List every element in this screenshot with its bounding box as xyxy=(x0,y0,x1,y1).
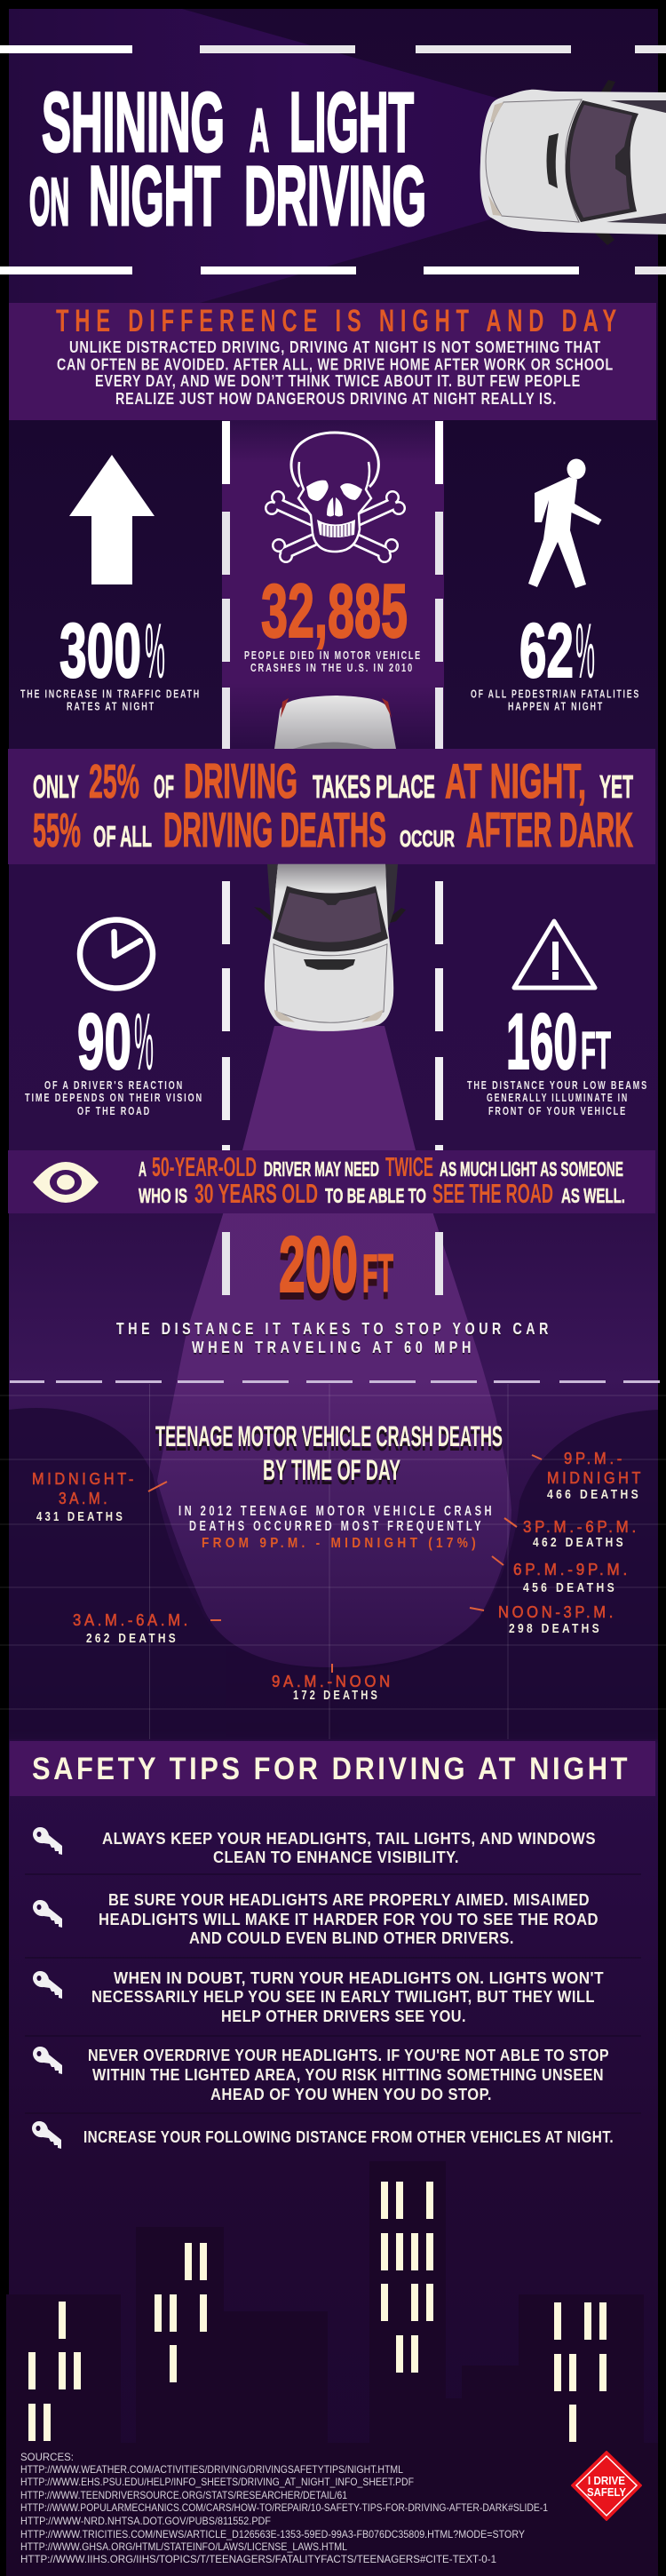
tip text: BE SURE YOUR HEADLIGHTS ARE PROPERLY AIMED. MISAIMED xyxy=(108,1891,590,1909)
building silhouettes xyxy=(6,2161,658,2576)
logo: I Drive Safely: I DRIVE xyxy=(588,2474,625,2487)
logo: I Drive Safely: SAFELY xyxy=(587,2485,626,2499)
label: midnight to 3am: MIDNIGHT- xyxy=(32,1470,137,1488)
line two: AS WELL. xyxy=(561,1184,625,1207)
label: 3pm to 6pm: 3P.M.-6P.M. xyxy=(523,1518,639,1536)
label: 9pm to midnight: MIDNIGHT xyxy=(547,1469,644,1487)
line one: YET xyxy=(599,768,633,805)
tip text: NECESSARILY HELP YOU SEE IN EARLY TWILIGHT, BUT THEY WILL xyxy=(91,1988,595,2006)
logo: I Drive Safely xyxy=(572,2452,641,2520)
tip text: WITHIN THE LIGHTED AREA, YOU RISK HITTING SOMETHING UNSEEN xyxy=(92,2066,604,2084)
line two: WHO IS xyxy=(139,1184,187,1207)
number 62%: 62 xyxy=(519,608,574,694)
icon: key xyxy=(33,1900,62,1928)
line one: 50-YEAR-OLD xyxy=(152,1151,257,1182)
chart description: DEATHS OCCURRED MOST FREQUENTLY xyxy=(189,1519,484,1534)
tip text: AND COULD EVEN BLIND OTHER DRIVERS. xyxy=(189,1929,514,1947)
dark side blobs xyxy=(9,1408,658,1739)
tip text: HEADLIGHTS WILL MAKE IT HARDER FOR YOU TO SEE THE ROAD xyxy=(99,1911,599,1928)
title: ON xyxy=(29,164,69,239)
stat: 90 percent xyxy=(25,920,203,1117)
label: 3am to 6am xyxy=(73,1611,221,1646)
icon: up arrow xyxy=(69,455,155,584)
icon: eye xyxy=(33,1162,99,1203)
icon: pedestrian xyxy=(528,458,602,588)
caption: OF THE ROAD xyxy=(77,1105,151,1117)
caption xyxy=(467,1079,648,1117)
title: LIGHT xyxy=(289,76,414,170)
road lane markings middle xyxy=(222,881,443,1150)
tip text xyxy=(91,1969,604,2025)
line two: 55% xyxy=(33,804,81,857)
title: DRIVING xyxy=(244,149,426,243)
line two xyxy=(139,1178,625,1209)
icon: key xyxy=(32,2121,61,2149)
tip separators xyxy=(25,1874,641,2113)
title: SHINING xyxy=(42,76,225,170)
chart description: IN 2012 TEENAGE MOTOR VEHICLE CRASH xyxy=(178,1504,495,1519)
sources: HTTP://WWW.GHSA.ORG/HTML/STATEINFO/LAWS/LICENSE_LAWS.HTML xyxy=(20,2540,347,2553)
sources: HTTP://WWW.TEENDRIVERSOURCE.ORG/STATS/RESEARCHER/DETAIL/61 xyxy=(20,2489,347,2501)
icon: key xyxy=(33,1971,62,1999)
label: 9am to noon xyxy=(272,1664,393,1703)
city skyline xyxy=(6,2161,658,2576)
stat: 160 feet xyxy=(467,921,648,1117)
label: 9am to noon: 9A.M.-NOON xyxy=(272,1673,393,1690)
tip 5 xyxy=(32,2121,614,2149)
caption: HAPPEN AT NIGHT xyxy=(508,700,604,712)
number 90%: 90 xyxy=(77,997,131,1085)
lit windows building 3 xyxy=(381,2182,433,2373)
caption xyxy=(116,1319,552,1356)
line one: DRIVING xyxy=(184,753,297,808)
stat: 300 percent xyxy=(20,455,201,712)
line two: SEE THE ROAD xyxy=(432,1178,553,1209)
caption: THE INCREASE IN TRAFFIC DEATH xyxy=(20,688,201,700)
label: 6pm to 9pm: 456 DEATHS xyxy=(523,1581,617,1595)
label: 9pm to midnight: 9P.M.- xyxy=(564,1450,625,1467)
stat: 160 feet: FT xyxy=(581,1022,611,1080)
label: 3am to 6am: 3A.M.-6A.M. xyxy=(73,1611,191,1629)
road lane markings lower xyxy=(222,1232,443,1295)
line one xyxy=(33,753,633,808)
line two: OF ALL xyxy=(93,820,152,853)
line one: TWICE xyxy=(385,1151,433,1182)
line two: DRIVING DEATHS xyxy=(163,802,386,857)
tip text xyxy=(102,1830,596,1866)
road lane centre xyxy=(222,420,444,749)
title xyxy=(29,76,426,243)
stat: 62 percent xyxy=(471,458,640,712)
label: 6pm to 9pm xyxy=(492,1556,630,1595)
callout: eyesight band xyxy=(8,1150,655,1213)
caption: TIME DEPENDS ON THEIR VISION xyxy=(25,1092,203,1104)
label: 3pm to 6pm xyxy=(504,1518,639,1550)
line one: A xyxy=(139,1157,147,1181)
line one: TAKES PLACE xyxy=(313,768,435,805)
headlight beam xyxy=(157,1026,511,1667)
label: 9am to noon: 172 DEATHS xyxy=(293,1689,380,1703)
road lane markings upper xyxy=(222,421,443,751)
caption xyxy=(25,1079,203,1117)
lit windows building 1 xyxy=(28,2302,81,2441)
label: 3pm to 6pm: 462 DEATHS xyxy=(533,1536,626,1550)
line one xyxy=(139,1151,623,1182)
panel: the difference is night and day xyxy=(9,303,656,420)
illustration: rear of car xyxy=(274,696,396,749)
tip 4 xyxy=(33,2047,609,2103)
sources xyxy=(20,2451,548,2565)
line two: OCCUR xyxy=(400,825,455,852)
stat: 32,885 deaths xyxy=(244,433,422,674)
lit windows building 2 xyxy=(155,2243,207,2382)
number 300%: 300 xyxy=(59,608,141,694)
line two xyxy=(33,802,633,857)
label: 9pm to midnight xyxy=(532,1450,644,1502)
tip text: AHEAD OF YOU WHEN YOU DO STOP. xyxy=(210,2086,492,2103)
sources: HTTP://WWW.IIHS.ORG/IIHS/TOPICS/T/TEENAGERS/FATALITYFACTS/TEENAGERS#CITE-TEXT-0-1 xyxy=(20,2553,496,2565)
line one: DRIVER MAY NEED xyxy=(264,1157,379,1181)
number 200FT: 200 xyxy=(279,1220,358,1308)
sources: HTTP://WWW.WEATHER.COM/ACTIVITIES/DRIVING/DRIVINGSAFETYTIPS/NIGHT.HTML xyxy=(20,2463,403,2476)
sources: SOURCES: xyxy=(20,2451,74,2463)
sources: HTTP://WWW.TRICITIES.COM/NEWS/ARTICLE_D126563E-1353-59ED-99A3-FB076DC35809.HTML?MODE=STORY xyxy=(20,2528,525,2540)
illustration: car from above facing down xyxy=(254,864,406,1031)
illustration: car from above facing left xyxy=(480,80,666,245)
line one: OF xyxy=(154,768,174,805)
chart title: BY TIME OF DAY xyxy=(263,1454,400,1486)
stat: 300 percent: % xyxy=(145,607,165,695)
tip text: WHEN IN DOUBT, TURN YOUR HEADLIGHTS ON. LIGHTS WON'T xyxy=(114,1969,604,1987)
chart title xyxy=(155,1420,503,1486)
caption xyxy=(471,688,640,712)
tip text xyxy=(88,2047,609,2103)
tip text: HELP OTHER DRIVERS SEE YOU. xyxy=(221,2008,466,2025)
tip 2 xyxy=(33,1891,599,1947)
label: noon to 3pm: NOON-3P.M. xyxy=(498,1603,616,1621)
grid lines xyxy=(0,1384,666,1739)
chart description xyxy=(178,1504,495,1551)
intro paragraph: REALIZE JUST HOW DANGEROUS DRIVING AT NIGHT REALLY IS. xyxy=(115,390,557,408)
intro paragraph xyxy=(57,338,614,408)
line two: TO BE ABLE TO xyxy=(325,1184,426,1207)
caption xyxy=(20,688,201,712)
stat: 62 percent: % xyxy=(575,607,595,695)
sources: HTTP://WWW.POPULARMECHANICS.COM/CARS/HOW-TO/REPAIR/10-SAFETY-TIPS-FOR-DRIVING-AFTER-DARK#SLIDE-1 xyxy=(20,2501,548,2514)
caption xyxy=(244,649,422,674)
road dashes bottom xyxy=(0,266,666,274)
line two: 30 YEARS OLD xyxy=(194,1178,318,1209)
icon: key xyxy=(33,1827,62,1855)
tip text: NEVER OVERDRIVE YOUR HEADLIGHTS. IF YOU'RE NOT ABLE TO STOP xyxy=(88,2047,609,2064)
tip 3 xyxy=(33,1969,604,2025)
stat: 90 percent: % xyxy=(134,998,154,1087)
tip text xyxy=(99,1891,599,1947)
caption: RATES AT NIGHT xyxy=(67,700,155,712)
sources: HTTP://WWW.EHS.PSU.EDU/HELP/INFO_SHEETS/DRIVING_AT_NIGHT_INFO_SHEET.PDF xyxy=(20,2476,414,2488)
chart description: FROM 9P.M. - MIDNIGHT (17%) xyxy=(202,1536,480,1551)
label: noon to 3pm: 298 DEATHS xyxy=(509,1622,602,1636)
label: 6pm to 9pm: 6P.M.-9P.M. xyxy=(513,1561,630,1578)
headlight beam xyxy=(9,9,502,303)
icon: clock xyxy=(80,920,153,988)
label: midnight to 3am: 431 DEATHS xyxy=(36,1510,125,1524)
road dashes top xyxy=(0,45,666,53)
hero section xyxy=(0,9,666,303)
number 160FT: 160 xyxy=(506,997,577,1085)
caption: OF A DRIVER'S REACTION xyxy=(44,1079,184,1092)
lit windows building 4 xyxy=(554,2302,607,2442)
stat: 200 feet stopping distance: FT xyxy=(362,1244,393,1303)
line one: 25% xyxy=(89,755,139,808)
chart: teenage crash deaths by time of day xyxy=(32,1420,644,1703)
number 32,885: 32,885 xyxy=(261,569,408,654)
label: noon to 3pm xyxy=(470,1603,616,1636)
icon: warning triangle xyxy=(514,921,595,988)
title: NIGHT xyxy=(89,149,220,243)
panel: safety tips heading xyxy=(10,1741,655,1796)
caption: WHEN TRAVELING AT 60 MPH xyxy=(192,1338,475,1356)
line one: ONLY xyxy=(33,768,79,805)
sources: HTTP://WWW-NRD.NHTSA.DOT.GOV/PUBS/811552.PDF xyxy=(20,2515,271,2527)
stat: 200 feet stopping distance xyxy=(116,1220,552,1356)
tip 1 xyxy=(33,1827,596,1866)
callout: driving statistics band xyxy=(8,749,655,864)
title: A xyxy=(250,97,269,164)
label: midnight to 3am: 3A.M. xyxy=(59,1490,110,1507)
label: 9pm to midnight: 466 DEATHS xyxy=(547,1488,641,1502)
tip text: CLEAN TO ENHANCE VISIBILITY. xyxy=(213,1849,459,1866)
caption: CRASHES IN THE U.S. IN 2010 xyxy=(250,662,414,674)
road dashes horizontal xyxy=(10,1380,660,1383)
icon: skull and crossbones xyxy=(265,433,406,563)
caption: PEOPLE DIED IN MOTOR VEHICLE xyxy=(244,649,422,662)
tip text: ALWAYS KEEP YOUR HEADLIGHTS, TAIL LIGHTS, AND WINDOWS xyxy=(102,1830,596,1848)
icon: key xyxy=(33,2047,62,2074)
label: midnight to 3am xyxy=(32,1470,167,1524)
label: 3am to 6am: 262 DEATHS xyxy=(86,1632,178,1646)
